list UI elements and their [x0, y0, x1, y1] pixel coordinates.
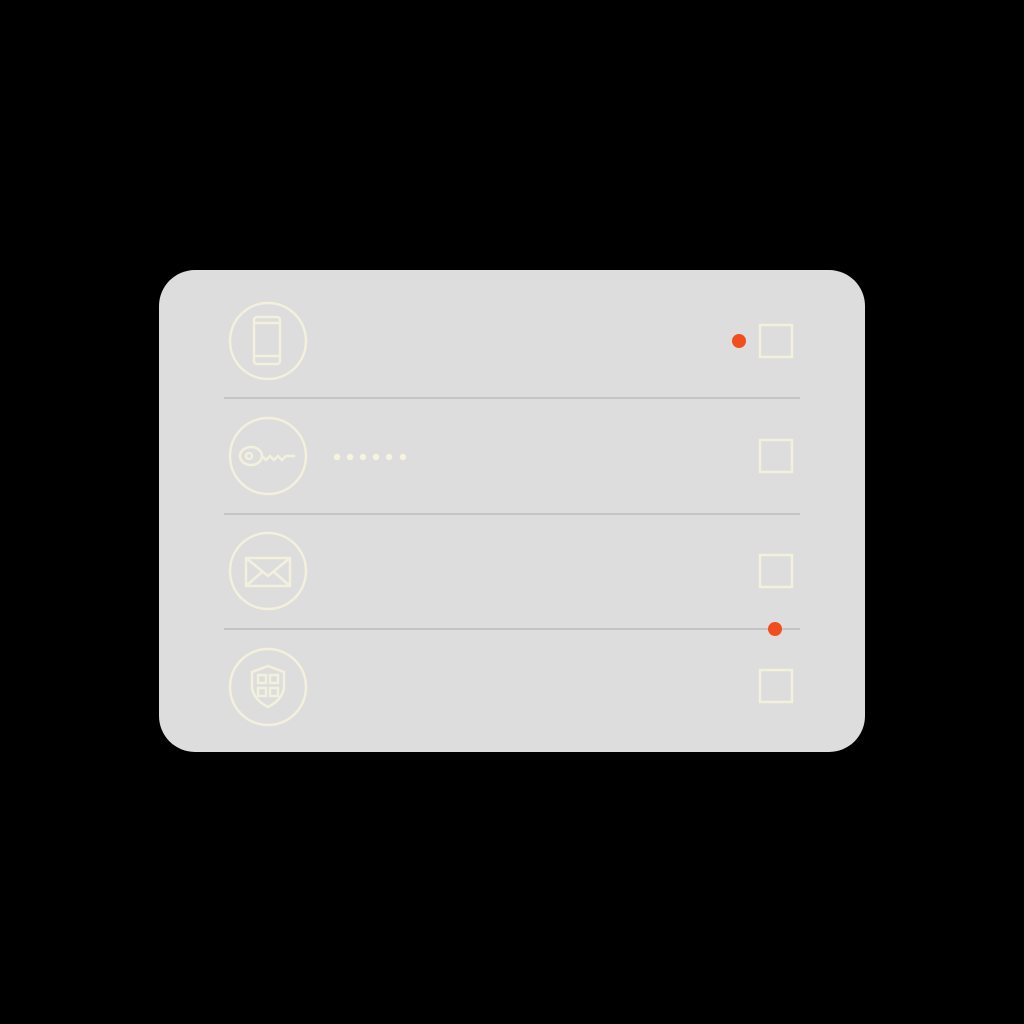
icon: key [230, 418, 306, 494]
icon: phone [230, 303, 306, 379]
indicator: red dots [732, 334, 782, 636]
panel: card [159, 270, 865, 752]
icon: shield [230, 649, 306, 725]
icon: envelope [230, 533, 306, 609]
checkboxes [760, 325, 792, 702]
password dots [334, 454, 406, 460]
